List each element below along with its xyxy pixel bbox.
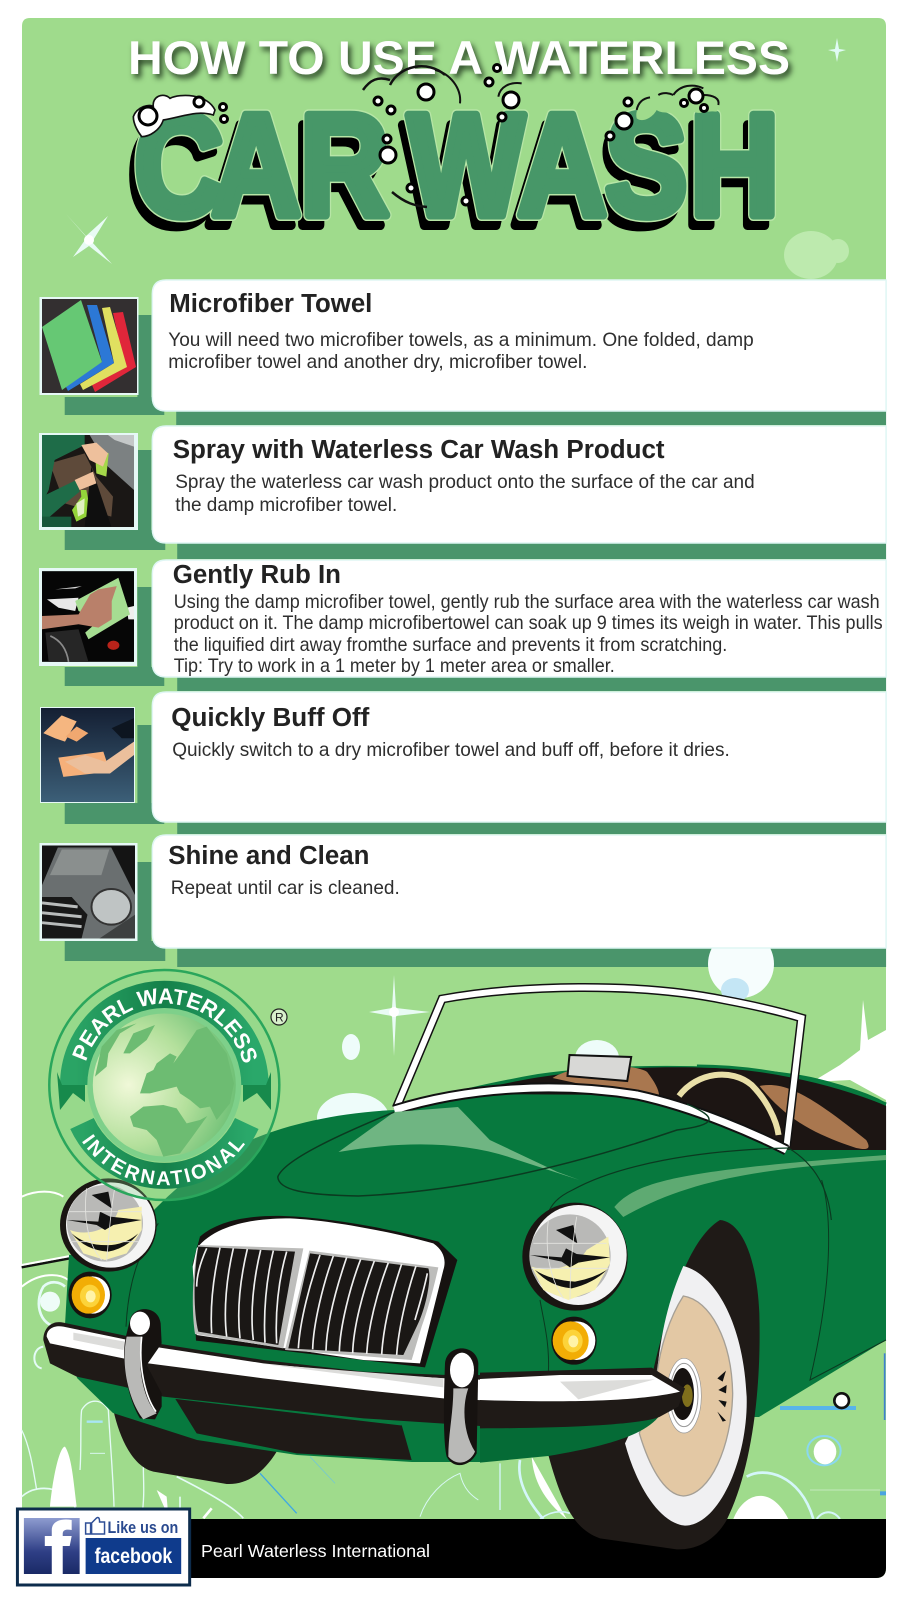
badge: like us on text: Like us on	[108, 1518, 178, 1537]
car: left fog light	[68, 1272, 112, 1318]
badge: facebook wordmark: facebook	[95, 1545, 173, 1568]
heading: car wash lettering	[128, 84, 779, 256]
car: right fog light	[551, 1317, 597, 1365]
logo: ribbon tails	[57, 1072, 271, 1110]
icon: photo of hand rubbing towel	[39, 568, 137, 666]
panel: dark green backing strips	[65, 315, 886, 967]
icon: foam on letters	[133, 66, 719, 207]
car: windshield frame	[396, 987, 801, 1146]
badge: facebook f icon	[24, 1518, 80, 1574]
heading: car wash lettering: WASH	[402, 94, 773, 256]
badge: facebook like us	[17, 1509, 190, 1585]
panel: step 1 microfiber towel: Microfiber Towel	[169, 290, 372, 318]
car: right bumper end	[480, 1368, 685, 1428]
car: bumper	[43, 1322, 490, 1427]
footer text: Pearl Waterless International	[201, 1541, 430, 1561]
illustration: green convertible car	[43, 987, 886, 1549]
heading: car wash lettering: CAR	[134, 84, 389, 246]
panel: step 3 gently rub in: Tip: Try to work in a 1 meter by 1 meter area or smaller.	[174, 656, 615, 677]
icon: photo of shiny clean car	[40, 843, 138, 941]
logo: top ribbon	[75, 996, 254, 1085]
heading: how to use a waterless: HOW TO USE A WATERLESS	[128, 32, 790, 85]
heading: car wash lettering: CAR	[134, 84, 389, 246]
panel: step 1 microfiber towel: You will need two microfiber towels, as a minimum. One folded, damp	[168, 330, 754, 351]
panel: step 5 shine and clean	[152, 835, 886, 948]
car: front grille	[193, 1216, 457, 1367]
icon: photo of spraying car	[39, 433, 138, 530]
logo: pearl waterless international	[48, 968, 288, 1202]
logo: curved text top	[86, 1004, 243, 1062]
panel: step 3 gently rub in: product on it. The damp microfibertowel can soak up 9 times its weigh in water. This pulls	[174, 613, 883, 634]
background line art lower right	[500, 1353, 886, 1519]
car: right headlight	[522, 1203, 628, 1311]
logo: registered mark	[271, 1009, 287, 1025]
car: hood highlight and lines	[339, 1107, 579, 1180]
heading: car wash lettering: CAR	[128, 94, 383, 256]
panel: step 4 quickly buff off	[152, 692, 886, 822]
panel: step 2 spray: Spray the waterless car wash product onto the surface of the car and	[175, 472, 755, 493]
icon: photo of buffing car	[40, 707, 135, 803]
heading: car wash lettering: WASH	[408, 84, 779, 246]
panel: step 3 gently rub in: Gently Rub In	[173, 561, 341, 589]
panel: step 4 quickly buff off: Quickly switch to a dry microfiber towel and buff off, before it dries.	[172, 740, 730, 761]
car: cockpit interior	[464, 1067, 886, 1150]
logo: curved text bottom	[81, 1141, 247, 1185]
logo: pearl waterless international: INTERNATIONAL	[82, 1134, 245, 1186]
background line art lower left	[22, 1192, 478, 1518]
panel: step 2 spray: the damp microfiber towel.	[175, 495, 397, 516]
car: right wheel	[548, 1220, 760, 1549]
car: upper bodywork	[278, 987, 886, 1220]
panel: step 2 spray: Spray with Waterless Car Wash Product	[173, 436, 665, 464]
badge: thumb icon	[86, 1518, 105, 1534]
panel: step 1 microfiber towel: microfiber towel and another dry, microfiber towel.	[168, 352, 587, 373]
panel: step 3 gently rub in: Using the damp microfiber towel, gently rub the surface area with the waterless car wash	[174, 592, 880, 613]
panel: step 3 gently rub in	[152, 560, 886, 677]
car: cowl trim	[394, 1088, 787, 1150]
panel: step 5 shine and clean: Shine and Clean	[168, 842, 369, 870]
logo: outer ring	[49, 970, 279, 1200]
car: lower valance panel	[175, 1398, 412, 1460]
panel: step 2 spray	[152, 426, 886, 543]
badge: facebook wordmark	[86, 1538, 181, 1574]
icon: soap bubbles	[139, 64, 708, 205]
logo: pearl waterless international: PEARL WATERLESS	[72, 988, 257, 1062]
car: center over-rider	[444, 1348, 478, 1465]
car: body over wheel	[480, 1415, 660, 1463]
car: left front tire	[113, 1410, 277, 1484]
car: green body	[65, 1066, 886, 1462]
background sparkles and bubbles	[66, 38, 886, 1143]
panel: step 1 microfiber towel	[152, 280, 886, 411]
car: mirror	[567, 1055, 631, 1081]
panel: step 5 shine and clean: Repeat until car is cleaned.	[171, 878, 400, 899]
logo: bottom ribbon	[82, 1124, 247, 1176]
logo: registered mark: R	[275, 1010, 284, 1024]
white bubble over strip	[708, 930, 774, 1002]
footer bar	[22, 1519, 886, 1578]
panel: step 4 quickly buff off: Quickly Buff Off	[171, 704, 370, 732]
icon: photo of microfiber towels	[40, 297, 138, 395]
car: left over-rider	[124, 1309, 162, 1419]
car: left headlight	[60, 1178, 157, 1272]
car: left front details	[43, 1178, 490, 1465]
car: right front details	[480, 1180, 886, 1549]
heading: car wash lettering: WASH	[408, 84, 779, 246]
logo: globe	[87, 1008, 241, 1162]
panel: step 3 gently rub in: the liquified dirt away fromthe surface and prevents it from scratching.	[174, 635, 727, 656]
